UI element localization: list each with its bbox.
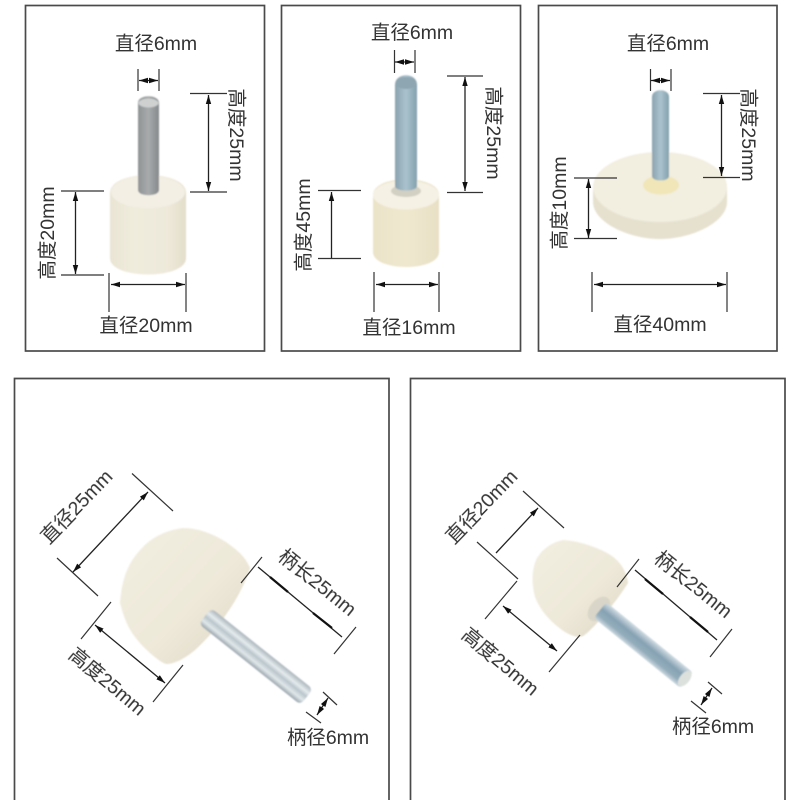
label: shank diameter 6mm: 柄径6mm <box>672 716 754 738</box>
panel: cylinder 20mm <box>26 6 264 351</box>
label: shank diameter 6mm: 直径6mm <box>115 33 197 55</box>
dimension: head diameter <box>374 272 439 312</box>
label: shank length 25mm: 柄长25mm <box>274 545 360 621</box>
dimension: head height <box>61 191 104 275</box>
panel: rounded felt head 25mm <box>14 378 389 800</box>
label: head diameter 25mm: 直径25mm <box>37 466 117 548</box>
label: shank length 25mm: 柄长25mm <box>650 547 736 623</box>
label: head height 25mm: 高度25mm <box>457 624 543 700</box>
icon: felt disc with blue shank <box>593 90 727 239</box>
icon: cylinder felt head with grey shank <box>110 96 186 274</box>
dimension: shank diameter <box>138 69 159 91</box>
label: shank diameter 6mm: 直径6mm <box>371 22 453 44</box>
dimension: head diameter <box>57 474 173 596</box>
label: shank height 25mm: 高度25mm <box>225 88 247 182</box>
dimension: shank height <box>703 94 740 178</box>
panel: disc 40mm <box>538 6 777 351</box>
dimension: shank height <box>190 94 227 192</box>
label: shank height 25mm: 高度25mm <box>737 88 759 182</box>
dimension: shank diameter <box>650 69 671 91</box>
label: head diameter 20mm: 直径20mm <box>99 315 193 337</box>
dimension: shank length <box>617 559 732 657</box>
label: shank height 25mm: 高度25mm <box>482 86 504 180</box>
label: head height 25mm: 高度25mm <box>64 644 150 720</box>
dimension: disc height <box>574 178 617 238</box>
label: disc diameter 40mm: 直径40mm <box>613 314 707 336</box>
label: head height 45mm: 高度45mm <box>293 178 315 272</box>
icon: dome felt head with shank <box>120 528 313 705</box>
dimension: shank diameter <box>691 682 722 713</box>
label: head height 20mm: 高度20mm <box>37 186 59 280</box>
icon: cylinder felt head with blue shank <box>373 75 439 267</box>
label: head diameter 20mm: 直径20mm <box>442 466 522 548</box>
dimension: shank length <box>241 557 356 654</box>
dimension: shank diameter <box>306 692 337 723</box>
dimension: head height <box>485 581 580 672</box>
dimension: head height <box>81 602 183 702</box>
dimension: shank height <box>447 76 483 192</box>
label: disc height 10mm: 高度10mm <box>549 156 571 250</box>
panel: cylinder 16mm <box>282 6 520 351</box>
icon: tapered felt head with shank <box>533 540 695 690</box>
dimension: disc diameter <box>592 272 727 312</box>
label: shank diameter 6mm: 柄径6mm <box>287 727 369 749</box>
dimension: head diameter <box>477 491 564 579</box>
dimension: head diameter <box>109 273 186 312</box>
dimension: head height <box>318 190 361 258</box>
label: head diameter 16mm: 直径16mm <box>362 317 456 339</box>
panel: tapered felt head 20mm <box>410 378 785 800</box>
label: shank diameter 6mm: 直径6mm <box>627 33 709 55</box>
dimension: shank diameter <box>394 50 415 73</box>
